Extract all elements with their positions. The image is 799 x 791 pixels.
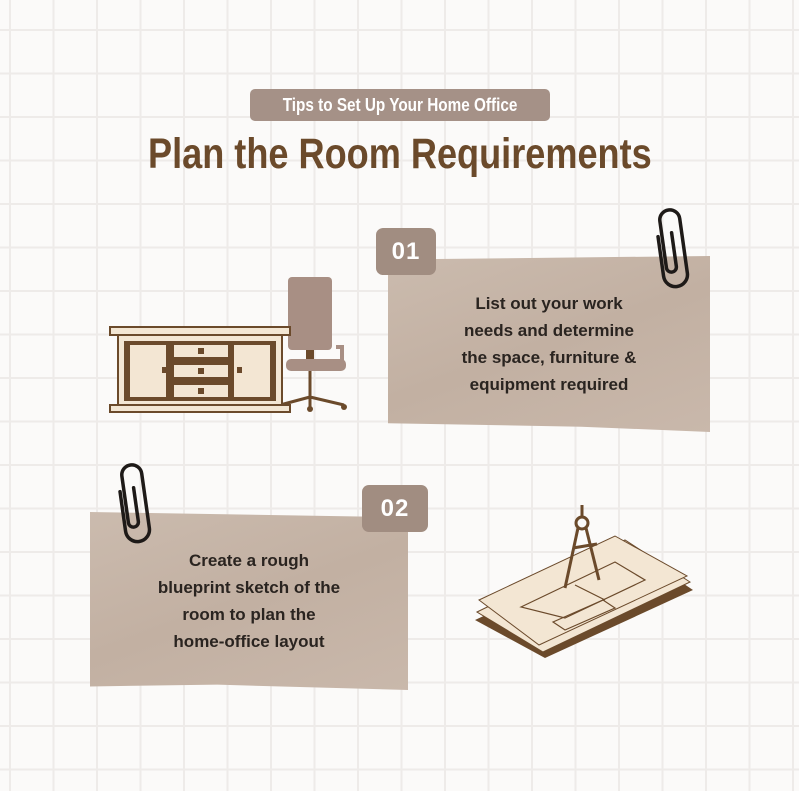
icon: desk and chair xyxy=(109,277,347,413)
panel: step 1: the space, furniture & xyxy=(462,348,636,367)
badge 02 xyxy=(362,485,428,532)
panel: step 1 xyxy=(388,256,710,432)
panel: step 2: blueprint sketch of the xyxy=(158,578,340,597)
subtitle pill xyxy=(250,89,550,121)
badge 02: 02 xyxy=(381,494,409,522)
panel: step 1: needs and determine xyxy=(464,321,634,340)
panel: step 2: home-office layout xyxy=(173,632,325,651)
icon: blueprint with compass xyxy=(475,505,693,658)
badge 01: 01 xyxy=(392,238,420,264)
subtitle pill: Tips to Set Up Your Home Office xyxy=(283,94,517,114)
panel: step 1: equipment required xyxy=(470,375,628,394)
icon: paperclip 1 xyxy=(656,208,690,288)
panel: step 2: room to plan the xyxy=(182,605,316,624)
panel: step 2: Create a rough xyxy=(189,551,309,570)
badge 01 xyxy=(376,228,436,275)
panel: step 2 xyxy=(90,512,408,690)
icon: paperclip 2 xyxy=(118,463,152,544)
title: Plan the Room Requirements xyxy=(148,130,652,178)
panel: step 1: List out your work xyxy=(475,294,623,313)
